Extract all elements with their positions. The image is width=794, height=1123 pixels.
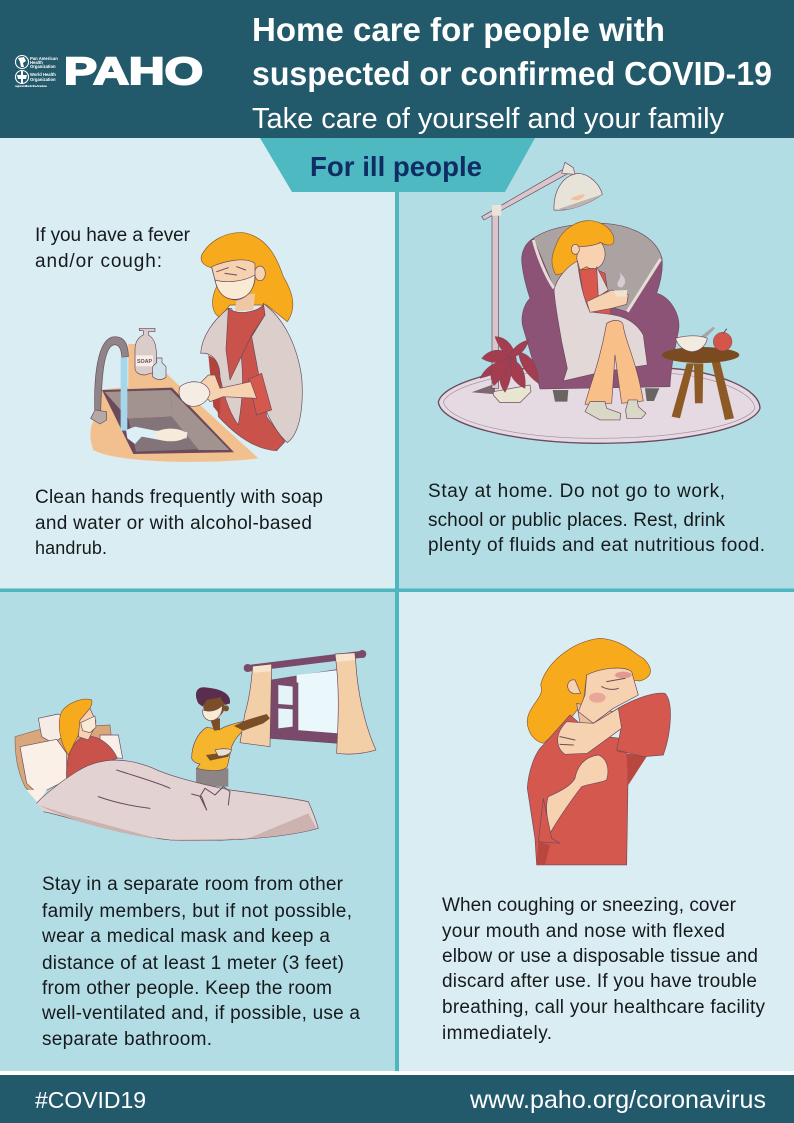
PAHO logo: World Health — [30, 72, 56, 77]
text: cough etiquette: your mouth and nose with flexed — [442, 921, 725, 942]
text: separate room: from other people. Keep the room — [42, 978, 332, 999]
text: separate room: Stay in a separate room from other — [42, 874, 344, 895]
banner: For ill people — [260, 138, 535, 192]
armchair — [522, 223, 679, 389]
text: cough etiquette: elbow or use a disposable tissue and — [442, 946, 758, 967]
PAHO logo: Pan American — [30, 56, 58, 61]
panel: stay at home — [428, 162, 765, 556]
text: separate room: family members, but if not possible, — [42, 901, 352, 922]
text: cough etiquette: When coughing or sneezing, cover — [442, 895, 737, 916]
footer band: www.paho.org/coronavirus — [469, 1086, 766, 1114]
text: clean hands — [35, 487, 323, 558]
soap bottle — [135, 328, 166, 380]
footer band — [0, 1075, 794, 1123]
blanket — [37, 760, 318, 841]
panel: cough etiquette — [442, 638, 766, 1044]
PAHO logo: Health — [30, 60, 43, 65]
panel: clean hands — [35, 225, 323, 558]
PAHO logo: regional office for the Americas — [15, 84, 47, 88]
PAHO logo: Organization — [30, 64, 56, 69]
title: suspected or confirmed COVID-19 — [252, 55, 772, 92]
text: clean hands: and water or with alcohol-based — [35, 513, 312, 534]
subtitle: Take care of yourself and your family — [252, 103, 724, 135]
text: separate room — [41, 874, 360, 1050]
text: clean hands: handrub. — [35, 538, 107, 558]
text: separate room: wear a medical mask and keep a — [41, 926, 330, 947]
text: cough etiquette: breathing, call your healthcare facility — [442, 997, 766, 1018]
robe — [554, 261, 647, 381]
illustration: woman resting in armchair — [438, 162, 760, 443]
side table — [662, 327, 739, 420]
text: fever intro: and/or cough: — [35, 251, 162, 272]
PAHO logo: Organization — [30, 77, 56, 82]
pants — [585, 320, 643, 404]
text: clean hands: Clean hands frequently with soap — [35, 487, 323, 508]
PAHO logo — [15, 51, 203, 93]
header band — [0, 0, 794, 138]
text: cough etiquette: discard after use. If you have trouble — [442, 971, 757, 992]
window — [234, 650, 376, 754]
footer band: #COVID19 — [35, 1087, 146, 1113]
banner: For ill people: For ill people — [310, 151, 482, 182]
text: separate room: separate bathroom. — [42, 1029, 212, 1050]
illustration: bed, carer and window — [15, 650, 376, 841]
text: stay at home: plenty of fluids and eat nutritious food. — [428, 535, 765, 556]
illustration: woman washing hands at sink — [90, 233, 302, 462]
text: separate room: distance of at least 1 meter (3 feet) — [42, 953, 344, 974]
carer — [192, 687, 271, 787]
text: stay at home — [428, 481, 765, 556]
title: Home care for people with — [252, 11, 665, 48]
text: separate room: well-ventilated and, if possible, use a — [41, 1003, 360, 1024]
illustration: woman coughing into elbow — [527, 638, 670, 865]
text: cough etiquette — [442, 895, 766, 1044]
title — [252, 11, 772, 135]
text: cough etiquette: immediately. — [442, 1023, 552, 1044]
text: fever intro: If you have a fever — [35, 225, 191, 246]
panel: separate room — [15, 650, 376, 1050]
text: stay at home: Stay at home. Do not go to work, — [428, 481, 725, 502]
text: stay at home: school or public places. Rest, drink — [428, 510, 726, 531]
text: fever intro — [35, 225, 191, 272]
soap bottle: SOAP — [137, 359, 153, 365]
plant — [480, 337, 538, 403]
PAHO logo: PAHO — [64, 51, 203, 93]
